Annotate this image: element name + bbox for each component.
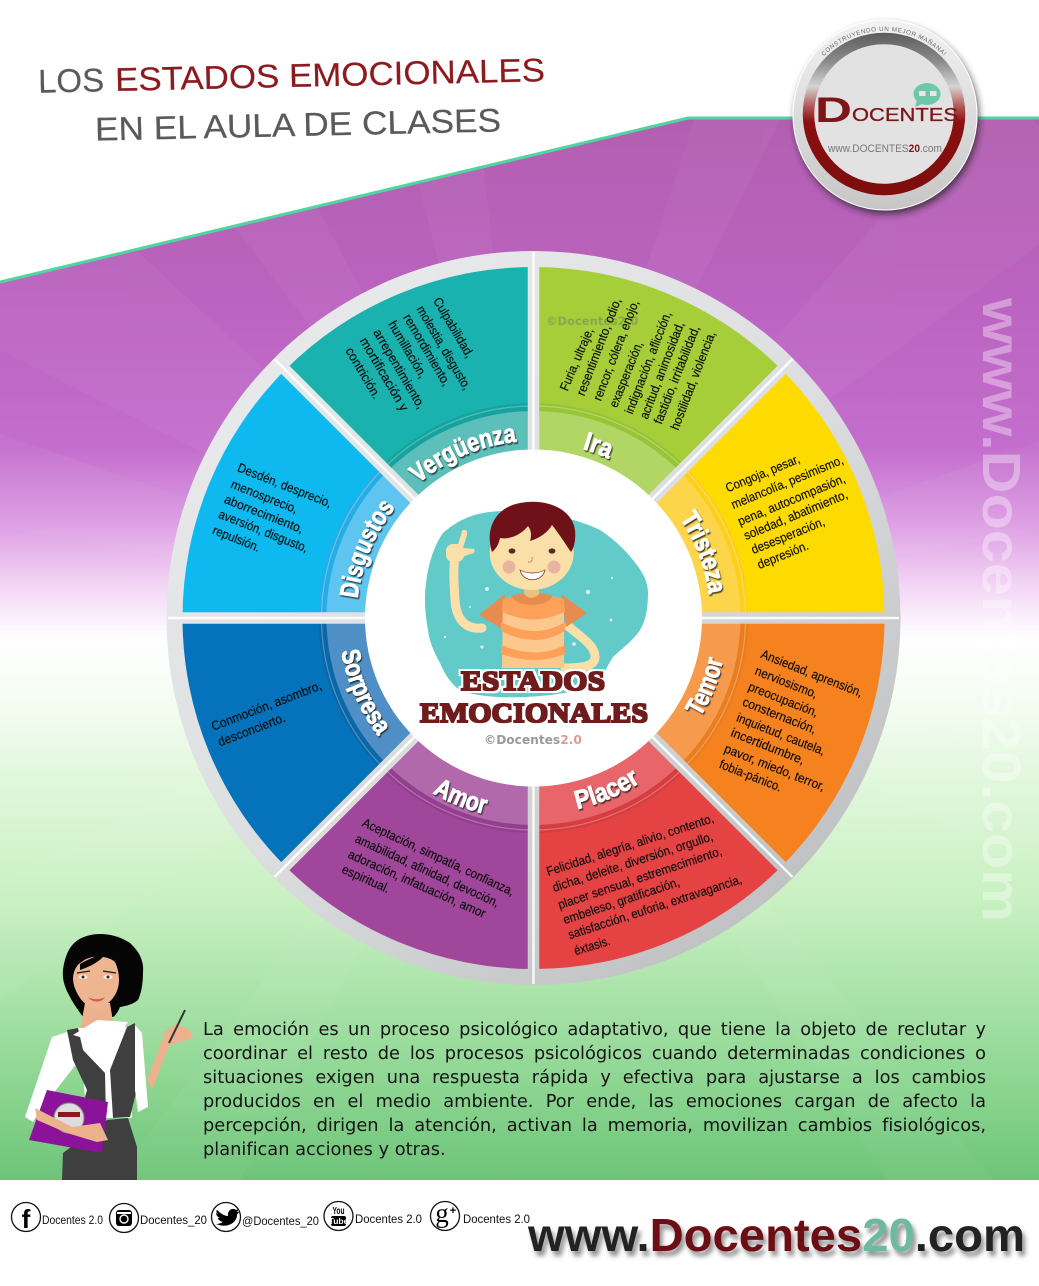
panel: Placer [534,618,782,969]
text: Ira list: rencor, cólera, enojo, [590,298,642,403]
panel: Amor [285,618,534,969]
text: Temor list: inquietud, cautela, [735,710,828,758]
label: Placer: Placer [574,770,639,812]
icon: youtube: You [332,1206,344,1217]
text block: definition paragraph: situaciones exigen una respuesta rápida y efectiva para ajustarse a los cambios [203,1067,986,1088]
center heading: Estados Emocionales: ESTADOS [461,666,605,696]
text: Placer list: éxtasis. [572,933,612,958]
logo badge: Docentes: OCENTES [852,105,958,125]
text: Temor list: pavor, miedo, terror, [722,741,827,794]
panel: Temor [534,618,884,866]
text: Temor list: Ansiedad, aprensión, [759,646,865,700]
center heading: Estados Emocionales [420,666,648,728]
icon: google plus [430,1198,460,1230]
text: Disgustos list [211,460,334,555]
shirt [479,585,587,668]
text: Amor list: adoración, infatuación, amor [346,846,489,921]
icon: instagram [110,1204,138,1232]
center credit: ©Docentes2.0 [484,733,582,747]
folder [29,1090,108,1153]
panel: Disgustos [182,370,534,618]
footer url: www.Docentes20.com [527,1209,1025,1261]
text: Disgustos list: menosprecio, [229,476,300,516]
panel: Tristeza [534,370,884,618]
text: Amor list: espiritual. [340,861,392,896]
raised arm [454,557,482,628]
text: Sorpresa list: desconcierto. [216,710,287,749]
text: Ira list: indignación, aflicción, [621,309,674,416]
title line 2: EN EL AULA DE CLASES [95,101,501,148]
text: Disgustos list: repulsión. [211,522,263,555]
text: Ira list: Furia, ultraje, [556,325,596,393]
text: Sorpresa list: Conmoción, asombro, [209,678,324,734]
text: Ira list: fastidio, irritabilidad, [650,323,703,426]
icon: google plus: + [450,1205,456,1217]
text: Tristeza list: melancolía, pesimismo, [729,452,845,512]
text: Placer list: satisfacción, euforia, extravagancia, [566,872,744,942]
text: Ira list: hostilidad, violencia, [667,329,718,432]
text block: definition paragraph: La emoción es un proceso psicológico adaptativo, que tiene la objeto de reclutar y [203,1019,986,1040]
text block: definition paragraph: coordinar el resto de los procesos psicológicos cuando determinadas condiciones o [203,1043,986,1064]
blouse [78,1027,132,1118]
text: Disgustos list: aborrecimiento, [222,491,306,536]
label: Sorpresa: Sorpresa [342,650,390,738]
text: Placer list: placer sensual, estremecimiento, [556,843,724,912]
text: Disgustos list: Desdén, desprecio, [236,460,334,510]
vest [67,1023,140,1118]
icon: google plus: g [435,1198,449,1228]
text: Vergüenza list: contrición. [343,344,384,401]
text: Ira list: resentimiento, odio, [573,296,624,398]
icon: twitter [212,1202,240,1232]
text: Tristeza list: depresión. [755,538,811,572]
other arm [565,626,595,668]
text: Tristeza list: pena, autocompasión, [735,471,847,529]
text: Temor list: consternación, [741,694,819,737]
text block: definition paragraph [203,1019,986,1160]
social row [12,1198,530,1234]
label: instagram: Docentes_20 [140,1213,207,1227]
icon: youtube: Tube [329,1216,349,1226]
blob [425,511,648,697]
label: Tristeza: Tristeza [682,508,724,597]
watermark on Ira panel: ©Docentes2.0 [546,314,638,328]
text block: definition paragraph: producidos en el medio ambiente. Por ende, las emociones cargan de afecto la [203,1091,986,1112]
text block: definition paragraph: planifican acciones y otras. [203,1139,446,1160]
text: Vergüenza list: Culpabilidad, [430,294,477,360]
icon: speech bubble [914,83,940,107]
text: Placer list [544,810,744,958]
text: Placer list: embeleso, gratificación, [561,874,681,927]
center white hub [365,450,702,786]
icon: facebook [12,1202,40,1234]
hair [490,502,575,552]
hand [446,530,475,562]
title line 1: ESTADOS EMOCIONALES [115,51,545,98]
arm over folder [35,1108,108,1142]
text: Ira list: acritud, animosidad, [636,319,687,421]
eyes and mouth [509,548,555,580]
head [490,516,574,590]
text: Temor list: incertidumbre, [729,725,807,767]
label: twitter: @Docentes_20 [242,1214,319,1228]
logo badge: Docentes: www.DOCENTES20.com [827,143,942,155]
text: Vergüenza list: arrepentimiento, [370,326,429,411]
text: Vergüenza list: mortificación y [357,334,412,414]
label: Amor: Amor [432,780,490,816]
text block: definition paragraph: percepción, dirigen la atención, activan la memoria, movilizan cambios fisiológicos, [203,1115,986,1136]
text: Placer list: Felicidad, alegría, alivio, contento, [544,810,715,879]
title line 1: LOS [38,61,104,100]
text: Placer list: dicha, deleite, diversión, orgullo, [550,829,715,895]
label: google plus: Docentes 2.0 [463,1212,530,1226]
label: Disgustos: Disgustos [340,501,396,600]
label: Temor: Temor [684,656,724,716]
illustration: boy on teal blob [425,502,648,697]
text: Temor list: nerviosismo, [753,663,820,701]
face and neck [80,1003,113,1052]
label: youtube: Docentes 2.0 [355,1212,422,1226]
collar [73,1020,128,1053]
text: Temor list: fobia-pánico. [717,756,784,794]
text: Vergüenza list: remordimiento, [400,311,454,389]
text: Tristeza list: soledad, abatimiento, [741,487,850,543]
label: Vergüenza: Vergüenza [406,428,519,482]
text: Tristeza list: desesperación, [749,514,827,557]
tab labels [340,428,724,816]
logo badge: Docentes: D [815,91,852,130]
title [38,51,545,148]
label: facebook: Docentes 2.0 [42,1213,103,1227]
text: Ira list [556,296,718,432]
left sleeve [25,1032,77,1122]
text: Tristeza list: Congoja, pesar, [723,451,802,495]
text: Vergüenza list [343,294,477,414]
logo badge: Docentes: CONSTRUYENDO UN MEJOR MAÑANA! [822,26,946,56]
text: Temor list [717,646,865,794]
center heading: Estados Emocionales: EMOCIONALES [420,698,648,728]
text: Amor list: amabilidad, afinidad, devoción, [353,831,502,910]
text: Disgustos list: aversión, disgusto, [217,506,310,555]
hair [63,934,143,1017]
panel: Sorpresa [182,618,534,866]
text: Vergüenza list: humillación, [385,318,431,381]
icon: youtube [324,1202,353,1230]
right sleeve and arm [135,1025,148,1112]
illustration: teacher [25,934,193,1180]
panel: Ira [534,267,782,618]
vertical watermark url: www.Docentes20.com [971,297,1031,922]
text: Tristeza list [723,451,850,572]
text: Ira list: exasperación, [606,339,646,410]
text: Amor list: Aceptación, simpatía, confianza, [360,815,517,899]
label: Ira: Ira [583,432,614,462]
logo badge: Docentes [789,18,985,220]
panel: Vergüenza [285,267,534,618]
icon: facebook: f [22,1204,31,1234]
skirt [62,1118,137,1180]
text: Vergüenza list: molestia, disgusto, [414,303,475,392]
text: Temor list: preocupación, [746,679,821,720]
emotion wheel [166,251,900,985]
